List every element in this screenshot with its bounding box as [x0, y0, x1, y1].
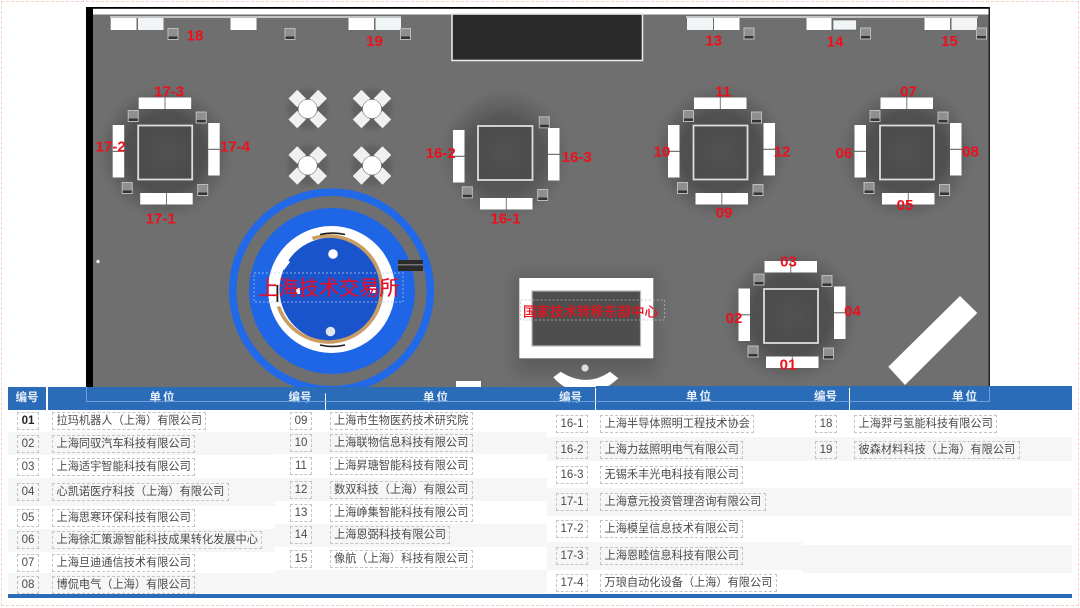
table column 2: 上海市生物医药技术研究院 — [334, 415, 468, 427]
stage screen — [452, 14, 642, 60]
table header: 编号 — [288, 392, 312, 404]
booth number labels — [96, 28, 979, 374]
table column 3: 上海意元投资管理咨询有限公司 — [604, 496, 761, 508]
table column 4: 彼森材料科技（上海）有限公司 — [858, 444, 1015, 456]
table column 3 — [228, 125, 928, 592]
table column 1: 上海旦迪通信技术有限公司 — [56, 557, 191, 569]
table column 2: 09 — [295, 415, 307, 427]
table header: 编号 — [559, 392, 582, 404]
table column 2: 上海峥集智能科技有限公司 — [334, 507, 468, 519]
table column 2: 11 — [295, 460, 307, 472]
table column 4: 18 — [820, 418, 832, 430]
booth number labels: 01 — [780, 356, 796, 374]
booth number labels: 17-2 — [96, 138, 126, 156]
label: Shanghai Technology Exchange: 上海技术交易所 — [258, 277, 400, 300]
table column 3: 17-1 — [560, 496, 584, 508]
table column 1: 博侃电气（上海）有限公司 — [56, 579, 191, 591]
booth 16 — [435, 85, 575, 225]
diagonal stand — [888, 296, 977, 385]
table column 3: 16-2 — [560, 444, 584, 456]
table header: 单位 — [686, 391, 713, 403]
table column 3: 17-2 — [560, 523, 584, 535]
booth number labels: 19 — [366, 33, 383, 50]
booth number labels: 08 — [962, 144, 979, 160]
booth number labels: 14 — [827, 34, 844, 50]
table column 2: 数双科技（上海）有限公司 — [334, 484, 468, 496]
booth number labels: 17-4 — [220, 138, 251, 156]
booth number labels: 16-3 — [562, 149, 592, 166]
table column 2: 上海昇瑭智能科技有限公司 — [334, 460, 468, 472]
booth number labels: 12 — [774, 144, 790, 160]
table header — [8, 386, 1072, 410]
table column 1 — [17, 125, 928, 594]
table column 1: 03 — [22, 461, 34, 473]
booth number labels: 18 — [187, 28, 203, 44]
table header: 单位 — [150, 392, 176, 404]
booth number labels: 11 — [715, 84, 731, 100]
table column 2: 12 — [295, 484, 307, 496]
floor plan outline over header — [86, 387, 990, 402]
booth 17 — [93, 80, 237, 224]
table header: 编号 — [814, 391, 837, 403]
booth number labels: 06 — [836, 145, 852, 162]
table header: 编号 — [16, 392, 38, 404]
lounge tables — [282, 83, 398, 192]
booth 01 to 04 — [719, 244, 863, 388]
booth number labels: 02 — [726, 310, 742, 327]
table column 1: 05 — [22, 512, 34, 524]
wall booths 18 and 19 — [111, 18, 410, 40]
table column 3: 无锡禾丰光电科技有限公司 — [604, 469, 739, 481]
table column 1: 01 — [22, 415, 34, 427]
table column 2: 10 — [295, 437, 307, 449]
table column 1: 心凯诺医疗科技（上海）有限公司 — [56, 486, 224, 498]
booth 09 to 12 — [648, 80, 792, 224]
booth 05 to 08 — [835, 80, 979, 224]
table column 1: 06 — [22, 534, 34, 546]
table column 3: 上海恩睦信息科技有限公司 — [604, 550, 739, 562]
booth number labels: 16-1 — [490, 210, 521, 228]
floor background — [86, 7, 990, 388]
table column 3: 17-3 — [560, 550, 584, 562]
national tech transfer stand — [515, 274, 657, 374]
table column 4: 上海羿弓氢能科技有限公司 — [858, 418, 993, 430]
table column 1: 拉玛机器人（上海）有限公司 — [56, 415, 202, 427]
table column 3: 16-3 — [560, 469, 584, 481]
table column 4: 19 — [820, 444, 832, 456]
table column 1: 上海适宇智能科技有限公司 — [56, 461, 191, 473]
table column 2: 13 — [295, 507, 307, 519]
table column 4 — [815, 415, 1020, 459]
back wall display rails — [110, 16, 978, 18]
booth number labels: 09 — [716, 204, 732, 222]
table column 3: 上海力兹照明电气有限公司 — [604, 444, 739, 456]
reception arc desk — [456, 364, 618, 388]
table column 3: 万琅自动化设备（上海）有限公司 — [604, 577, 772, 589]
table column 1: 02 — [22, 438, 34, 450]
booth number labels: 17-1 — [146, 210, 176, 228]
table column 1: 上海徐汇策源智能科技成果转化发展中心 — [56, 534, 258, 546]
table column 2: 像航（上海）科技有限公司 — [334, 553, 468, 565]
table column 3: 上海模呈信息技术有限公司 — [604, 523, 739, 535]
booth number labels: 15 — [941, 33, 958, 50]
table column 1: 上海同驭汽车科技有限公司 — [56, 438, 191, 450]
label: National Tech Transfer East Center: 国家技术转移东部中心 — [523, 304, 658, 320]
booth number labels: 05 — [897, 197, 913, 214]
booth number labels: 13 — [705, 32, 722, 50]
table column 2 — [228, 125, 928, 568]
wall booths 13 14 15 — [687, 18, 986, 39]
table column 2: 15 — [295, 553, 307, 565]
table column 1: 07 — [22, 557, 34, 569]
table column 3: 17-4 — [560, 577, 584, 589]
table column 3: 16-1 — [560, 418, 584, 430]
table bottom rule — [8, 594, 1072, 598]
table column 2: 14 — [295, 529, 307, 541]
table column 1: 04 — [22, 486, 34, 498]
table column 3: 上海半导体照明工程技术协会 — [604, 418, 750, 430]
table header: 单位 — [952, 391, 979, 403]
booth number labels: 04 — [844, 303, 861, 320]
table header: 单位 — [423, 392, 450, 404]
table column 1: 上海思寒环保科技有限公司 — [56, 512, 191, 524]
booth number labels: 10 — [654, 144, 670, 160]
booth number labels: 16-2 — [426, 145, 456, 162]
table column 1: 08 — [22, 579, 34, 591]
table column 2: 上海恩弼科技有限公司 — [334, 529, 446, 541]
booth number labels: 07 — [900, 84, 917, 100]
central round stand — [233, 192, 430, 390]
table column 2: 上海联物信息科技有限公司 — [334, 437, 468, 449]
booth number labels: 17-3 — [154, 84, 184, 100]
booth number labels: 03 — [780, 254, 797, 270]
